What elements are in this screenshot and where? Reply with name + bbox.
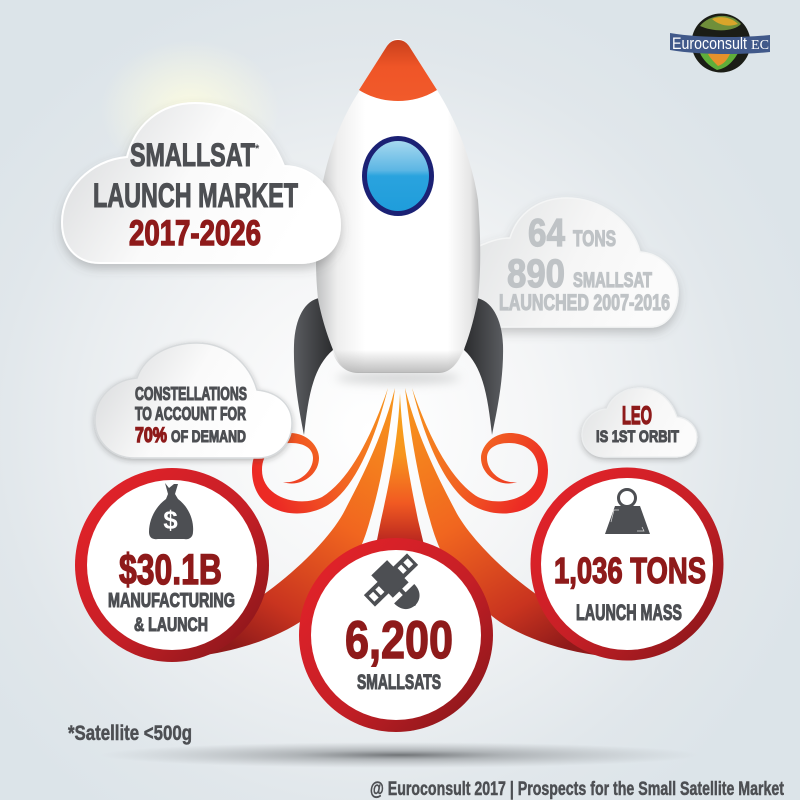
footnote: *Satellite <500g: [68, 722, 192, 745]
text: launched 2007-2016: LAUNCHED 2007-2016: [499, 290, 670, 315]
title text: 2017-2026: [129, 214, 261, 253]
LEO text: LEO: [622, 402, 652, 430]
constellations text: OF DEMAND: [171, 427, 246, 446]
rocket: [294, 39, 503, 435]
title text: SMALLSAT: [130, 137, 255, 173]
panel: smallsats: [299, 538, 493, 732]
flames and swirls: [190, 388, 610, 655]
constellations text: 70%: [135, 424, 167, 447]
constellations text: TO ACCOUNT FOR: [135, 404, 246, 424]
stat: 64 tons: [528, 212, 616, 255]
rocket window: [362, 136, 434, 216]
logo: Euroconsult: EC: [751, 38, 769, 53]
left fin: [294, 298, 333, 435]
stat: 6,200: 6,200: [345, 611, 453, 670]
icon: satellite: [358, 547, 437, 626]
title text: LAUNCH MARKET: [93, 177, 298, 215]
rocket nose: [359, 40, 437, 101]
title text: [93, 137, 298, 253]
flame: right band: [405, 388, 610, 655]
stat: 1,036 tons: 1,036 TONS: [554, 550, 706, 591]
title text: *: [255, 143, 260, 155]
icon: money bag: [149, 483, 193, 539]
label: and launch: & LAUNCH: [134, 615, 208, 636]
logo: Euroconsult: [670, 14, 770, 72]
stat: $30.1B: $30.1B: [119, 546, 222, 594]
icon: weight: [605, 490, 650, 534]
flame: right outer stripe with swirl: [412, 388, 548, 513]
body bottom shade: [332, 350, 463, 373]
cloud: constellations: [95, 343, 292, 458]
label: smallsats: SMALLSATS: [357, 671, 441, 694]
flame: center stripe: [376, 393, 424, 545]
logo: Euroconsult: Euroconsult: [672, 34, 747, 53]
cloud: past launches: [470, 198, 678, 327]
LEO text: [596, 402, 679, 446]
stat: 890 smallsat: [507, 252, 652, 296]
rocket shadow under body: [336, 372, 460, 384]
panel: manufacturing and launch: [75, 468, 269, 662]
label: manufacturing: MANUFACTURING: [108, 590, 235, 612]
stat: 64 tons: TONS: [573, 226, 616, 251]
constellations text: [135, 384, 247, 447]
label: launch mass: LAUNCH MASS: [576, 600, 682, 625]
cloud: LEO: [582, 388, 697, 457]
stat: 890 smallsat: SMALLSAT: [573, 269, 652, 292]
flame: left outer stripe with swirl: [252, 388, 388, 513]
stat: 64 tons: 64: [528, 212, 565, 255]
LEO text: IS 1ST ORBIT: [596, 427, 679, 446]
rocket body: [316, 39, 480, 372]
panel: launch mass: [530, 468, 724, 660]
constellations text: CONSTELLATIONS: [135, 384, 247, 404]
icon: money bag: $: [163, 505, 178, 535]
flame: left band: [190, 388, 395, 655]
stat: 890 smallsat: 890: [507, 252, 565, 296]
right fin: [464, 298, 503, 435]
cloud: title: [62, 103, 340, 263]
